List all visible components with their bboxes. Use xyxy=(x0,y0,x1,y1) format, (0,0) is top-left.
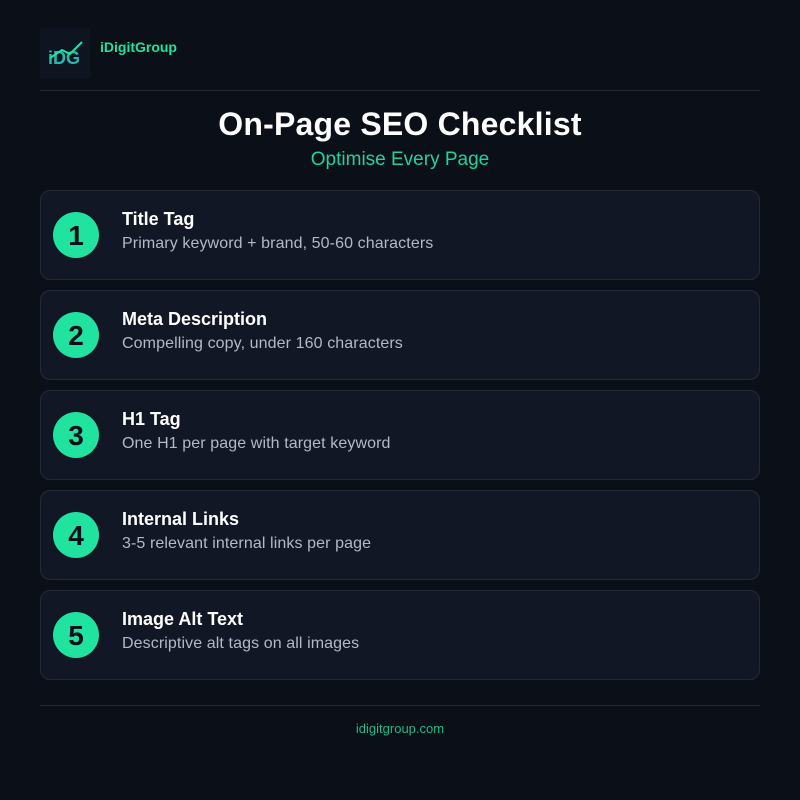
card 1: Title Tag xyxy=(122,209,194,229)
card 2: Meta Description xyxy=(122,309,267,329)
card 3: 3 xyxy=(68,420,84,451)
card 2: Compelling copy, under 160 characters xyxy=(122,335,403,352)
card 5: Descriptive alt tags on all images xyxy=(122,635,359,652)
card 4: 4 xyxy=(68,520,84,551)
card 3: H1 Tag xyxy=(122,409,181,429)
subtitle: Optimise Every Page xyxy=(311,149,489,170)
card 4 xyxy=(40,490,760,580)
card 4: Internal Links xyxy=(122,509,239,529)
card 3: One H1 per page with target keyword xyxy=(122,435,391,452)
logo xyxy=(40,28,90,78)
card 1: 1 xyxy=(68,220,84,251)
card 3 xyxy=(40,390,760,480)
brand name: iDigitGroup xyxy=(100,39,177,55)
logo: iDG xyxy=(48,48,80,68)
card 4: 3-5 relevant internal links per page xyxy=(122,535,371,552)
card 2 xyxy=(40,290,760,380)
card 5: Image Alt Text xyxy=(122,609,243,629)
card 5 xyxy=(40,590,760,680)
card 5: 5 xyxy=(68,620,84,651)
card 1 xyxy=(40,190,760,280)
title: On-Page SEO Checklist xyxy=(218,106,582,142)
footer: idigitgroup.com xyxy=(356,721,444,736)
card 2: 2 xyxy=(68,320,84,351)
card 1: Primary keyword + brand, 50-60 characters xyxy=(122,235,433,252)
